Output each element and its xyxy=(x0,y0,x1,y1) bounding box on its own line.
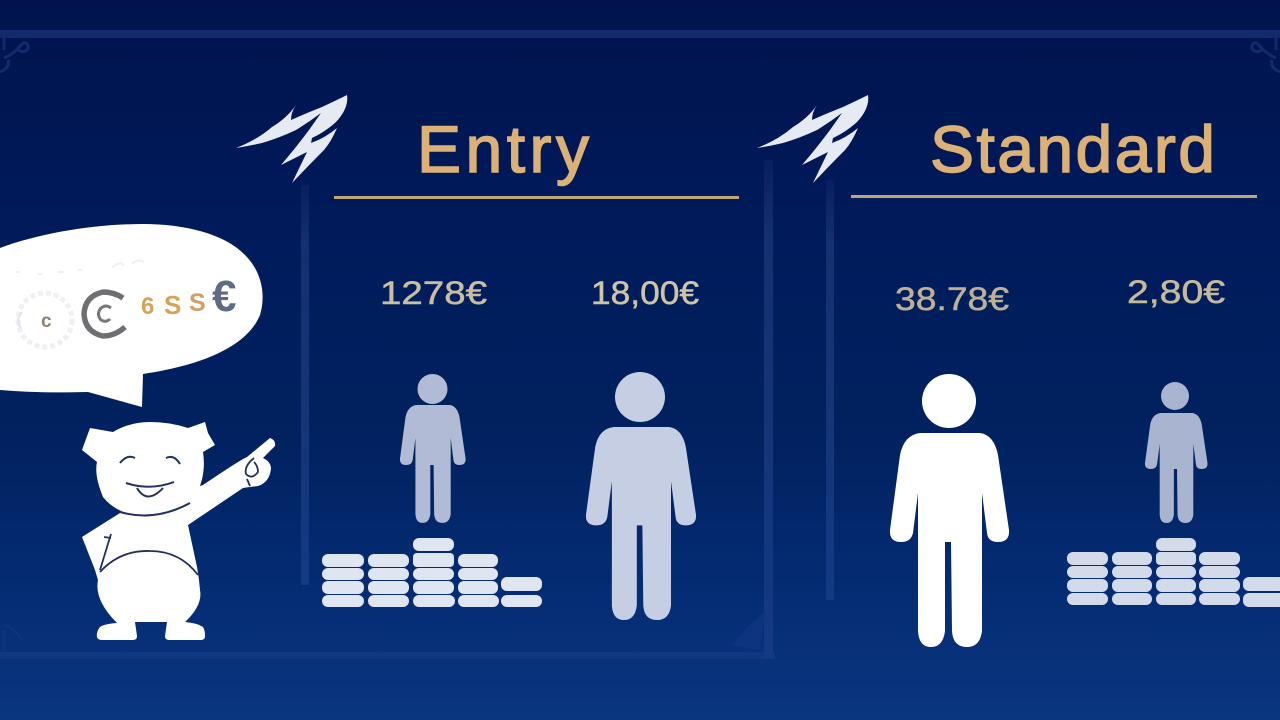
heading rule xyxy=(334,196,739,199)
price: first entry: 1278€ xyxy=(380,275,487,311)
pig character xyxy=(82,422,275,640)
heading: Standard: Standard xyxy=(930,112,1215,186)
pig head xyxy=(82,422,215,517)
chart: standard coin stacks xyxy=(1067,538,1280,607)
currency glyphs xyxy=(141,289,206,320)
price: second standard: 2,80€ xyxy=(1127,274,1225,310)
price: first standard: 38.78€ xyxy=(895,281,1009,317)
icon: small person xyxy=(400,374,466,523)
speech bubble xyxy=(0,224,263,407)
pig body lines xyxy=(100,458,258,575)
currency glyphs: S xyxy=(164,290,181,320)
large coin icon xyxy=(84,292,125,336)
pig face xyxy=(120,457,190,515)
heading rule xyxy=(851,195,1257,198)
currency glyphs: 6 xyxy=(141,293,154,320)
currency glyphs: S xyxy=(189,289,206,317)
icon: large person xyxy=(586,372,696,620)
icon: standard wing emblem xyxy=(757,95,868,183)
heading: Entry: Entry xyxy=(417,112,589,186)
icon: largest person xyxy=(890,374,1009,647)
faint gear mark xyxy=(15,260,144,347)
euro icon: € xyxy=(212,272,236,321)
icon: small person xyxy=(1145,382,1208,523)
panel: pig mascot with speech bubble xyxy=(0,224,275,640)
small coin glyph: c xyxy=(41,311,52,332)
icon: entry wing emblem xyxy=(236,95,347,183)
chart: entry coin stacks xyxy=(322,538,542,607)
panel: entry tier xyxy=(322,112,739,620)
panel: standard tier xyxy=(851,112,1280,647)
pig body xyxy=(82,438,275,640)
price: second entry: 18,00€ xyxy=(591,275,699,311)
